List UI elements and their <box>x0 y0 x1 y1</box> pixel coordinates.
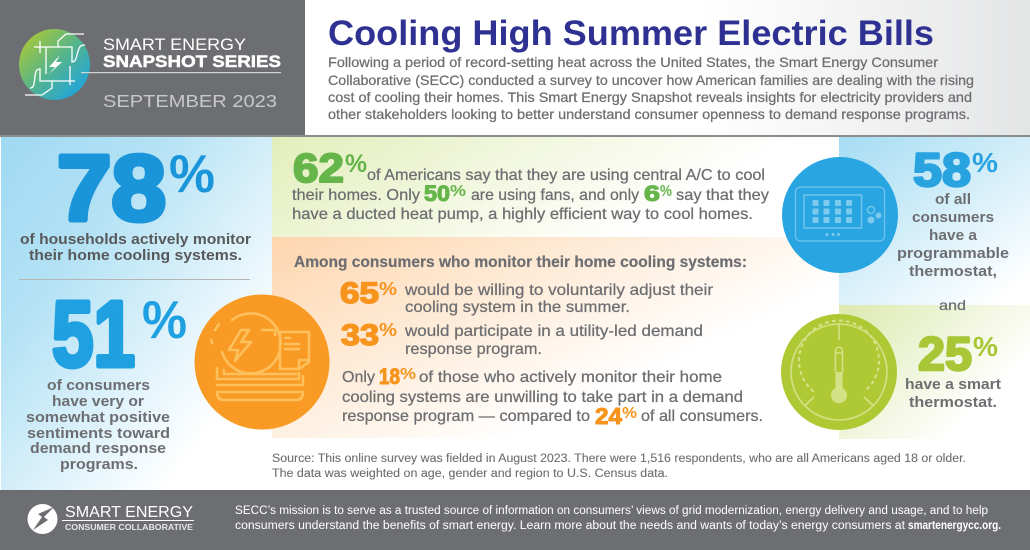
title: Cooling High Summer Electric Bills <box>328 14 934 53</box>
stat: 33 percent participate: would participate in a utility-led demand <box>404 323 703 340</box>
text block: SECC mission: smartenergycc.org. <box>908 520 1001 532</box>
text block: central A/C usage: % <box>345 150 367 178</box>
text block: unwilling consumers: cooling systems are unwilling to take part in a demand <box>342 389 743 406</box>
stat: 25 percent smart thermostat <box>905 327 1001 411</box>
icon: smart thermostat gauge <box>781 314 897 430</box>
stat: 33 percent participate <box>341 319 703 358</box>
text: snapshot series: SNAPSHOT SERIES <box>103 52 281 71</box>
panel: left statistics background <box>1 137 272 490</box>
text block: central A/C usage: 62 <box>293 145 344 191</box>
text: and: and <box>939 297 966 313</box>
stat: 58 percent programmable thermostat: % <box>972 147 998 178</box>
stat: 25 percent smart thermostat: have a smart <box>905 376 1001 393</box>
text block: unwilling consumers: % <box>400 366 416 383</box>
text block: central A/C usage: say that they <box>676 187 769 204</box>
text block: central A/C usage: % <box>450 183 466 200</box>
stat: 65 percent willing: would be willing to voluntarily adjust their <box>404 282 714 299</box>
text block: SECC mission: SECC’s mission is to serve as a trusted source of information on consumers’ views of grid modernization, energy delivery and usage, and to help <box>235 505 988 517</box>
stat: 33 percent participate: % <box>379 320 397 340</box>
icon: smart energy snapshot logo <box>19 29 90 100</box>
text: september 2023: SEPTEMBER 2023 <box>103 91 277 111</box>
stat: 58 percent programmable thermostat: 58 <box>913 143 971 196</box>
stat: 58 percent programmable thermostat: consumers <box>912 209 994 226</box>
stat: 58 percent programmable thermostat <box>897 143 1009 280</box>
stat: 58 percent programmable thermostat: of all <box>935 191 971 208</box>
stat: 78 percent: of households actively monitor <box>20 231 251 248</box>
stat: 65 percent willing: % <box>379 279 397 299</box>
text block: unwilling consumers: 18 <box>379 364 400 389</box>
stat: 25 percent smart thermostat: thermostat. <box>909 394 997 411</box>
text block: introduction <box>328 54 974 122</box>
panel: series masthead <box>0 0 305 135</box>
stat: 65 percent willing <box>340 277 714 316</box>
text block: unwilling consumers: % <box>622 405 637 422</box>
stat: 58 percent programmable thermostat: thermostat, <box>909 263 997 280</box>
stat: 51 percent: programs. <box>60 456 138 473</box>
stat: 51 percent: somewhat positive <box>26 409 170 426</box>
icon: orange energy report <box>194 294 330 430</box>
text block: introduction: Following a period of record-setting heat across the United States, the Smart Energy Consumer <box>328 54 938 70</box>
stat: 58 percent programmable thermostat: programmable <box>897 245 1009 262</box>
text block: survey source: Source: This online survey was fielded in August 2023. There were 1,516 respondents, who are all Americans aged 18 or older. <box>272 453 966 465</box>
text block: central A/C usage: % <box>660 183 672 200</box>
stat: 51 percent: of consumers <box>47 377 150 394</box>
stat: 65 percent willing: cooling system in the summer. <box>405 299 630 316</box>
text block: unwilling consumers <box>342 364 763 429</box>
text block: central A/C usage: have a ducted heat pump, a highly efficient way to cool homes. <box>292 206 753 223</box>
text block: central A/C usage: their homes. Only <box>292 187 420 204</box>
stat: 58 percent programmable thermostat: have a <box>929 227 978 244</box>
text block: unwilling consumers: 24 <box>595 403 622 429</box>
text block: central A/C usage: of Americans say that they are using central A/C to cool <box>367 167 765 184</box>
stat: 65 percent willing: 65 <box>340 277 379 310</box>
panel: footer <box>0 490 1030 550</box>
text block: unwilling consumers: of all consumers. <box>641 408 763 425</box>
stat: 33 percent participate: response program. <box>405 341 542 358</box>
icon: programmable thermostat <box>782 157 898 273</box>
text block: survey source: The data was weighted on age, gender and region to U.S. Census data. <box>272 468 668 480</box>
stat: 51 percent: % <box>142 291 187 350</box>
stat: 51 percent: have very or <box>52 393 144 410</box>
stat: 25 percent smart thermostat: % <box>973 331 998 362</box>
stat: 51 percent: demand response <box>30 440 166 457</box>
text block: SECC mission: consumers understand the benefits of smart energy. Learn more about the needs and wants of today’s energy consumers at <box>235 520 906 532</box>
stat: 78 percent <box>20 136 251 264</box>
text block: unwilling consumers: Only <box>342 369 375 386</box>
text block: central A/C usage <box>292 145 769 223</box>
text block: unwilling consumers: of those who actively monitor their home <box>419 369 722 386</box>
stat: 51 percent: sentiments toward <box>27 425 170 442</box>
panel: programmable thermostat background <box>839 137 1030 305</box>
stat: 33 percent participate: 33 <box>341 319 379 352</box>
text block: introduction: Collaborative (SECC) conducted a survey to uncover how American families are dealing with the rising <box>328 72 974 88</box>
stat: 78 percent: % <box>169 145 215 204</box>
text: smart energy collaborative logotype: SMART ENERGY <box>65 504 193 521</box>
stat: 51 percent: 51 <box>52 282 135 386</box>
text: smart energy collaborative logotype: CONSUMER COLLABORATIVE <box>65 523 194 532</box>
text block: introduction: cost of cooling their homes. This Smart Energy Snapshot reveals insights for electricity providers and <box>328 89 972 105</box>
text block: SECC mission <box>235 505 1001 532</box>
stat: 25 percent smart thermostat: 25 <box>918 327 972 380</box>
panel: smart thermostat background <box>839 305 1030 439</box>
icon: smart energy collaborative bolt <box>28 504 58 534</box>
text block: central A/C usage: 50 <box>424 181 450 206</box>
stat: 51 percent <box>26 282 187 473</box>
panel: central A/C background <box>272 137 840 237</box>
text block: central A/C usage: 6 <box>644 181 660 206</box>
text block: introduction: other stakeholders looking to better understand consumer openness to demand response programs. <box>328 106 970 122</box>
panel: header title background <box>305 0 1030 135</box>
panel: monitoring consumers background <box>272 237 840 438</box>
text: smart energy: SMART ENERGY <box>103 35 246 54</box>
text: smart energy collaborative logotype <box>62 504 194 532</box>
text block: unwilling consumers: response program — compared to <box>342 408 590 425</box>
heading: among consumers: Among consumers who monitor their home cooling systems: <box>294 254 747 271</box>
text block: central A/C usage: are using fans, and only <box>471 187 639 204</box>
text block: survey source <box>272 453 966 480</box>
stat: 78 percent: 78 <box>57 136 166 240</box>
stat: 78 percent: their home cooling systems. <box>29 247 242 264</box>
